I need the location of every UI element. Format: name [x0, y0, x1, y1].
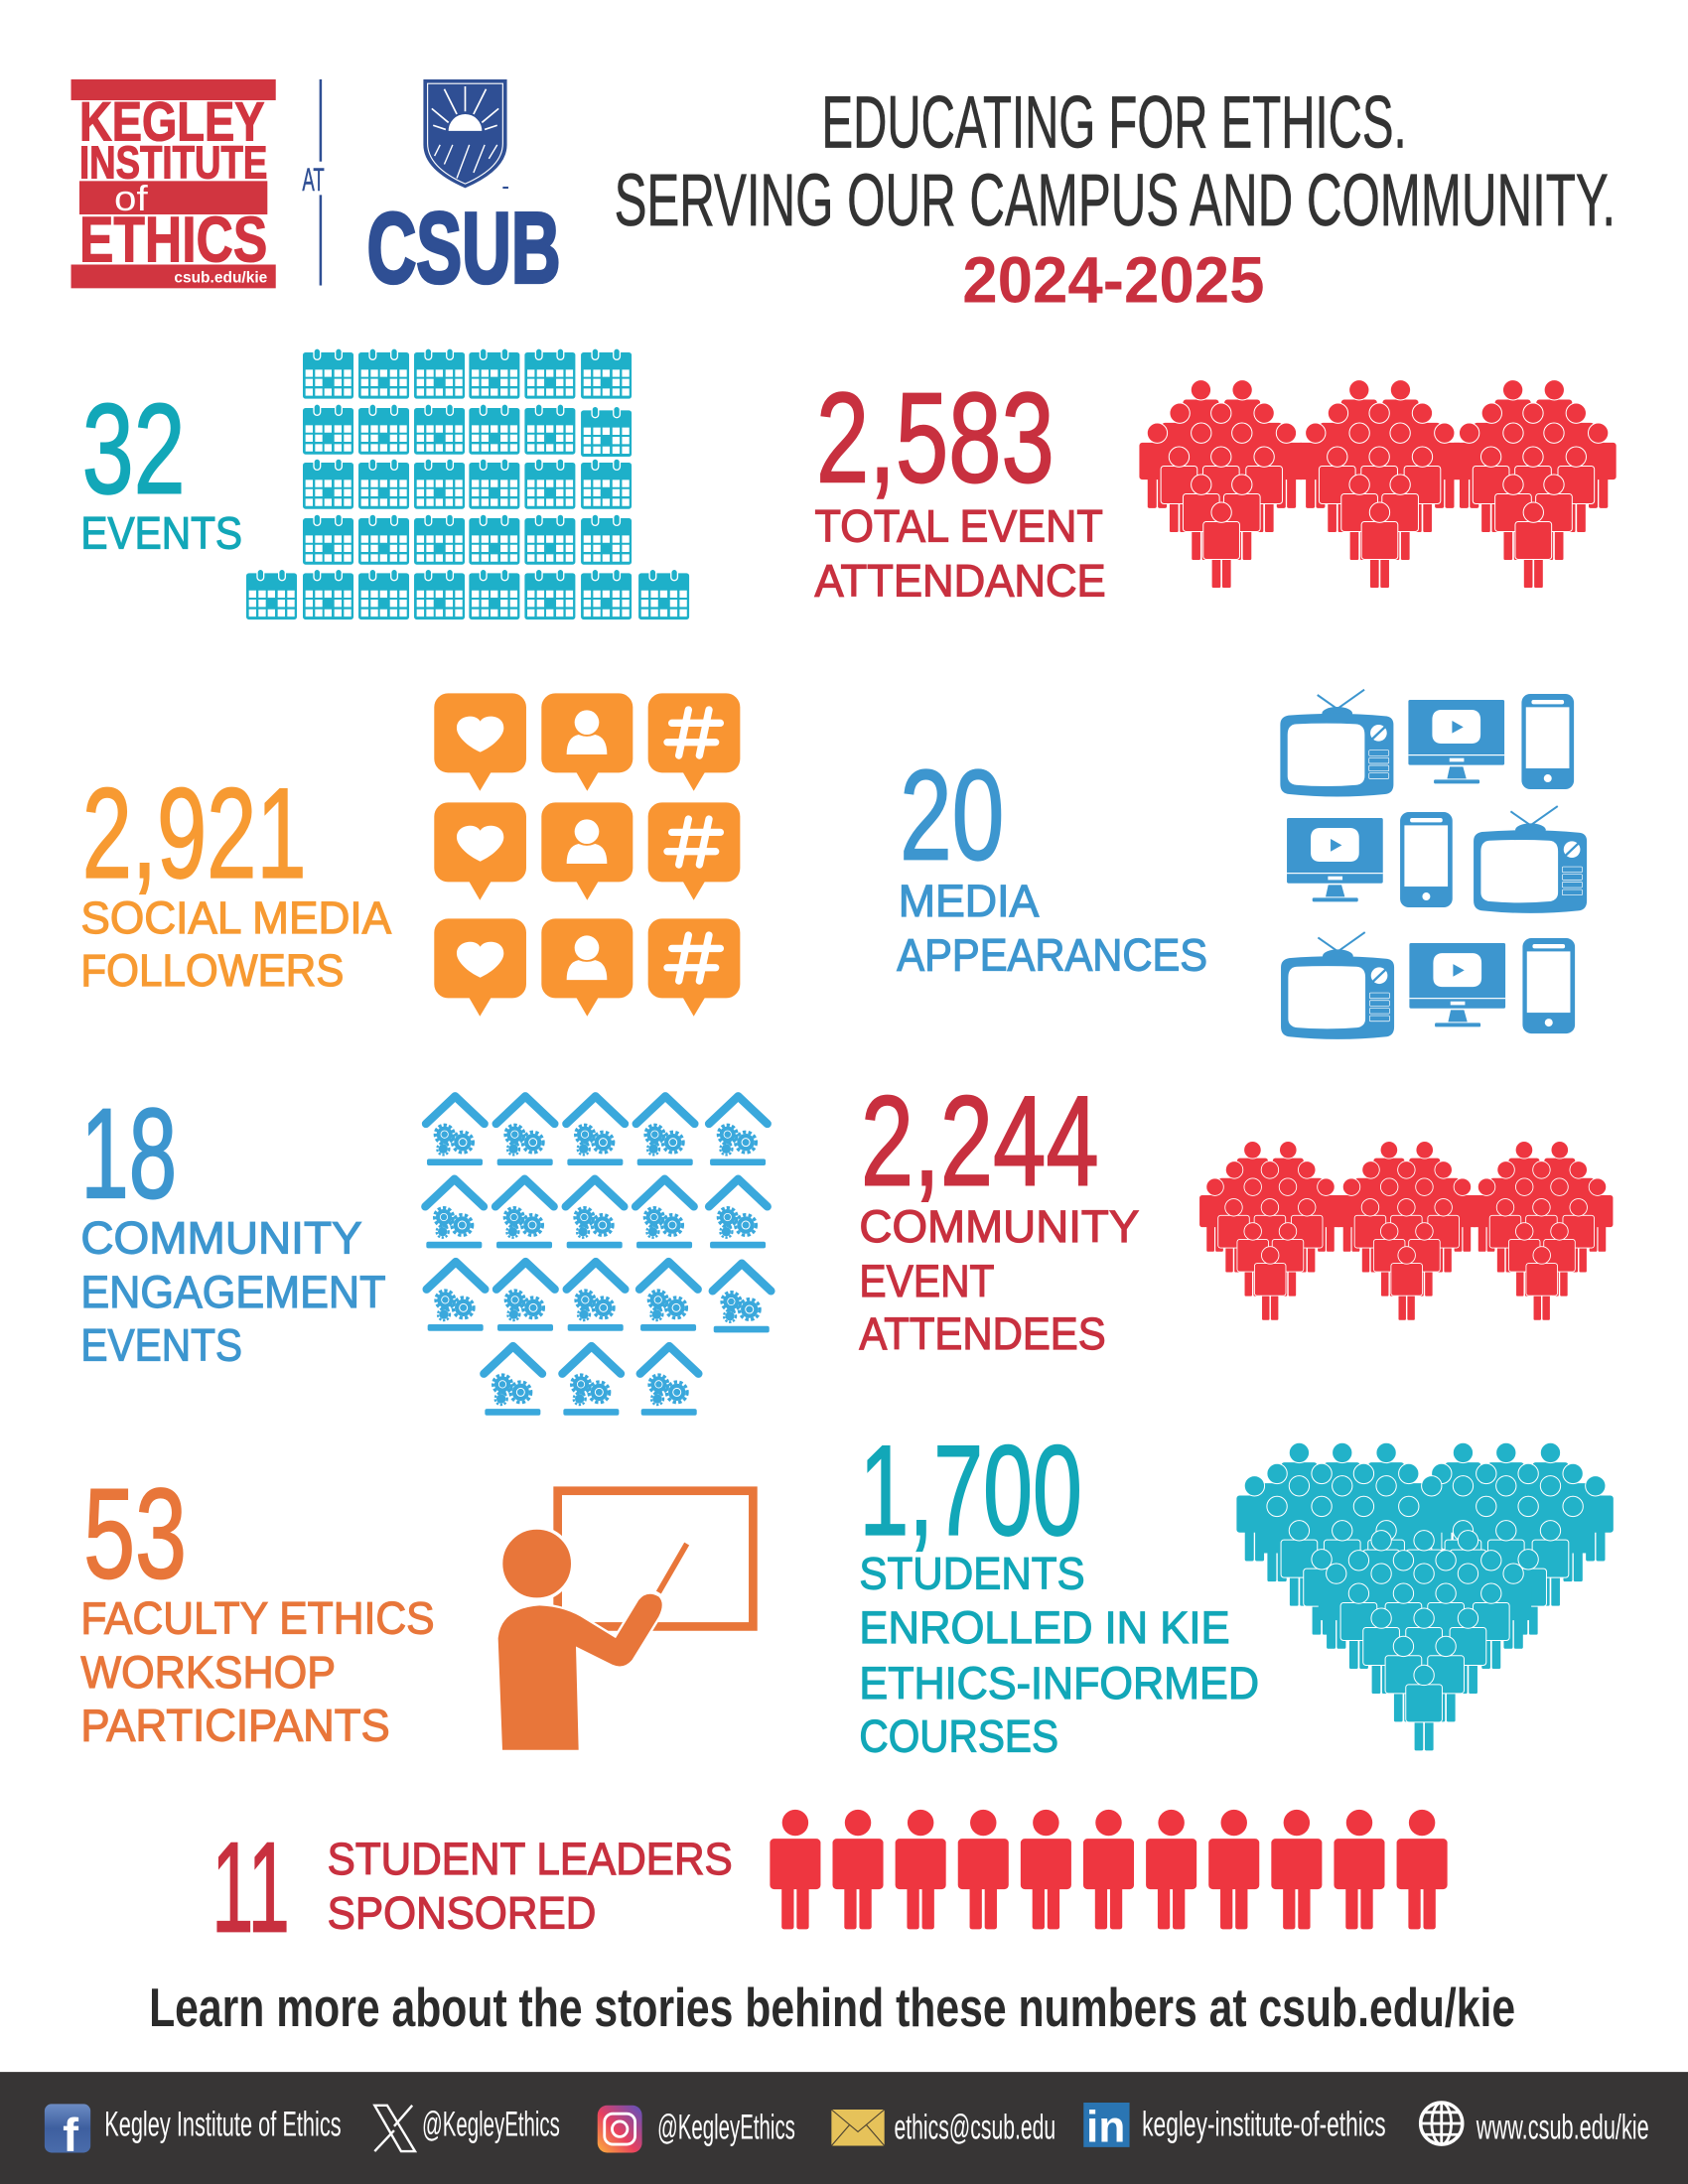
logo: CSUB shield [423, 79, 508, 189]
label: students enrolled in KIE ethics-informed courses: COURSES [859, 1711, 1058, 1762]
icon: LinkedIn: in [1086, 2101, 1125, 2151]
logo: Kegley Institute of Ethics: csub.edu/kie [174, 269, 267, 287]
number: 32 events: 32 [82, 378, 186, 521]
label: community engagement events: EVENTS [80, 1319, 242, 1370]
label: community event attendees [859, 1201, 1139, 1359]
label: total event attendance [815, 501, 1106, 606]
label: community engagement events: ENGAGEMENT [80, 1267, 386, 1317]
panel: community event attendees [859, 1070, 1613, 1359]
title: 2024-2025 [962, 242, 1265, 316]
label: social media followers: FOLLOWERS [80, 945, 344, 996]
panel: events [80, 348, 689, 619]
number: 2,921: 2,921 [82, 762, 307, 905]
label: students enrolled in KIE ethics-informed courses [859, 1548, 1259, 1762]
icons: social media bubbles [434, 693, 740, 1017]
label: student leaders sponsored: SPONSORED [328, 1888, 596, 1939]
logo: CSUB wordmark: CSUB [367, 194, 561, 305]
label: faculty ethics workshop participants: PARTICIPANTS [80, 1700, 390, 1750]
panel: media appearances [897, 690, 1587, 1039]
icon: Facebook: f [63, 2110, 78, 2162]
title [615, 81, 1616, 316]
logo: Kegley Institute of Ethics: of [114, 178, 149, 218]
label: social media followers: SOCIAL MEDIA [80, 892, 392, 943]
divider with AT label: AT [302, 162, 325, 198]
Facebook name: Kegley Institute of Ethics [104, 2106, 342, 2144]
icon: globe [1421, 2103, 1463, 2144]
label: community engagement events [80, 1212, 386, 1370]
number: 53: 53 [83, 1462, 187, 1605]
label: community event attendees: EVENT [859, 1256, 994, 1306]
number: 20: 20 [900, 744, 1004, 887]
label: community event attendees: COMMUNITY [859, 1201, 1139, 1252]
label: students enrolled in KIE ethics-informed courses: ETHICS-INFORMED [859, 1658, 1259, 1708]
number: 2,583: 2,583 [816, 366, 1055, 509]
footer bar [0, 2072, 1688, 2184]
Instagram handle: @KegleyEthics [657, 2108, 795, 2146]
label: media appearances [897, 876, 1207, 981]
number: 18: 18 [80, 1082, 177, 1225]
panel: faculty ethics workshop participants [80, 1462, 753, 1750]
label: students enrolled in KIE ethics-informed courses: ENROLLED IN KIE [859, 1602, 1230, 1653]
number: 11: 11 [211, 1816, 290, 1959]
panel: student leaders sponsored [211, 1810, 1448, 1959]
panel: community engagement events [80, 1082, 771, 1416]
icon: heart made of people [1236, 1442, 1614, 1751]
LinkedIn name: kegley-institute-of-ethics [1142, 2106, 1386, 2144]
label: faculty ethics workshop participants [80, 1592, 435, 1750]
email address: ethics@csub.edu [894, 2108, 1055, 2146]
label: events: EVENTS [80, 508, 242, 559]
icon: Instagram [598, 2106, 642, 2152]
label: community engagement events: COMMUNITY [80, 1212, 362, 1263]
logo: Kegley Institute of Ethics: KEGLEY [79, 90, 265, 153]
number: 1,700: 1,700 [859, 1420, 1082, 1563]
label: student leaders sponsored: STUDENT LEADERS [328, 1834, 733, 1884]
logo: Kegley Institute of Ethics [71, 79, 276, 288]
icons: three groups of people [1139, 380, 1617, 589]
panel: total event attendance [815, 366, 1617, 606]
panel: social media followers [80, 693, 740, 1017]
icon: email envelope [831, 2110, 885, 2145]
icons: 18 houses with gears [425, 1096, 771, 1416]
label: media appearances: MEDIA [899, 876, 1040, 926]
label: students enrolled in KIE ethics-informed courses: STUDENTS [859, 1548, 1085, 1598]
icon: teacher pointing at a board [498, 1491, 753, 1750]
number: 2,244: 2,244 [861, 1070, 1099, 1213]
icons: televisions, monitors and phones [1280, 690, 1587, 1039]
label: faculty ethics workshop participants: WORKSHOP [80, 1647, 336, 1698]
label: media appearances: APPEARANCES [897, 930, 1207, 981]
label: student leaders sponsored [328, 1834, 733, 1939]
label: social media followers [80, 892, 392, 996]
label: community event attendees: ATTENDEES [859, 1308, 1106, 1359]
icons: three groups of people [1199, 1142, 1613, 1320]
X handle: @KegleyEthics [422, 2106, 560, 2144]
label: total event attendance: ATTENDANCE [815, 555, 1106, 606]
panel: students enrolled [859, 1420, 1614, 1762]
icons: 32 calendars [246, 348, 689, 619]
label: faculty ethics workshop participants: FACULTY ETHICS [80, 1592, 435, 1643]
logo: Kegley Institute of Ethics: INSTITUTE [79, 137, 267, 189]
logo: Kegley Institute of Ethics: ETHICS [79, 205, 267, 276]
icon: X [374, 2106, 415, 2151]
icon: Facebook [45, 2104, 90, 2162]
icons: 11 people [770, 1810, 1448, 1929]
label: total event attendance: TOTAL EVENT [815, 501, 1103, 552]
